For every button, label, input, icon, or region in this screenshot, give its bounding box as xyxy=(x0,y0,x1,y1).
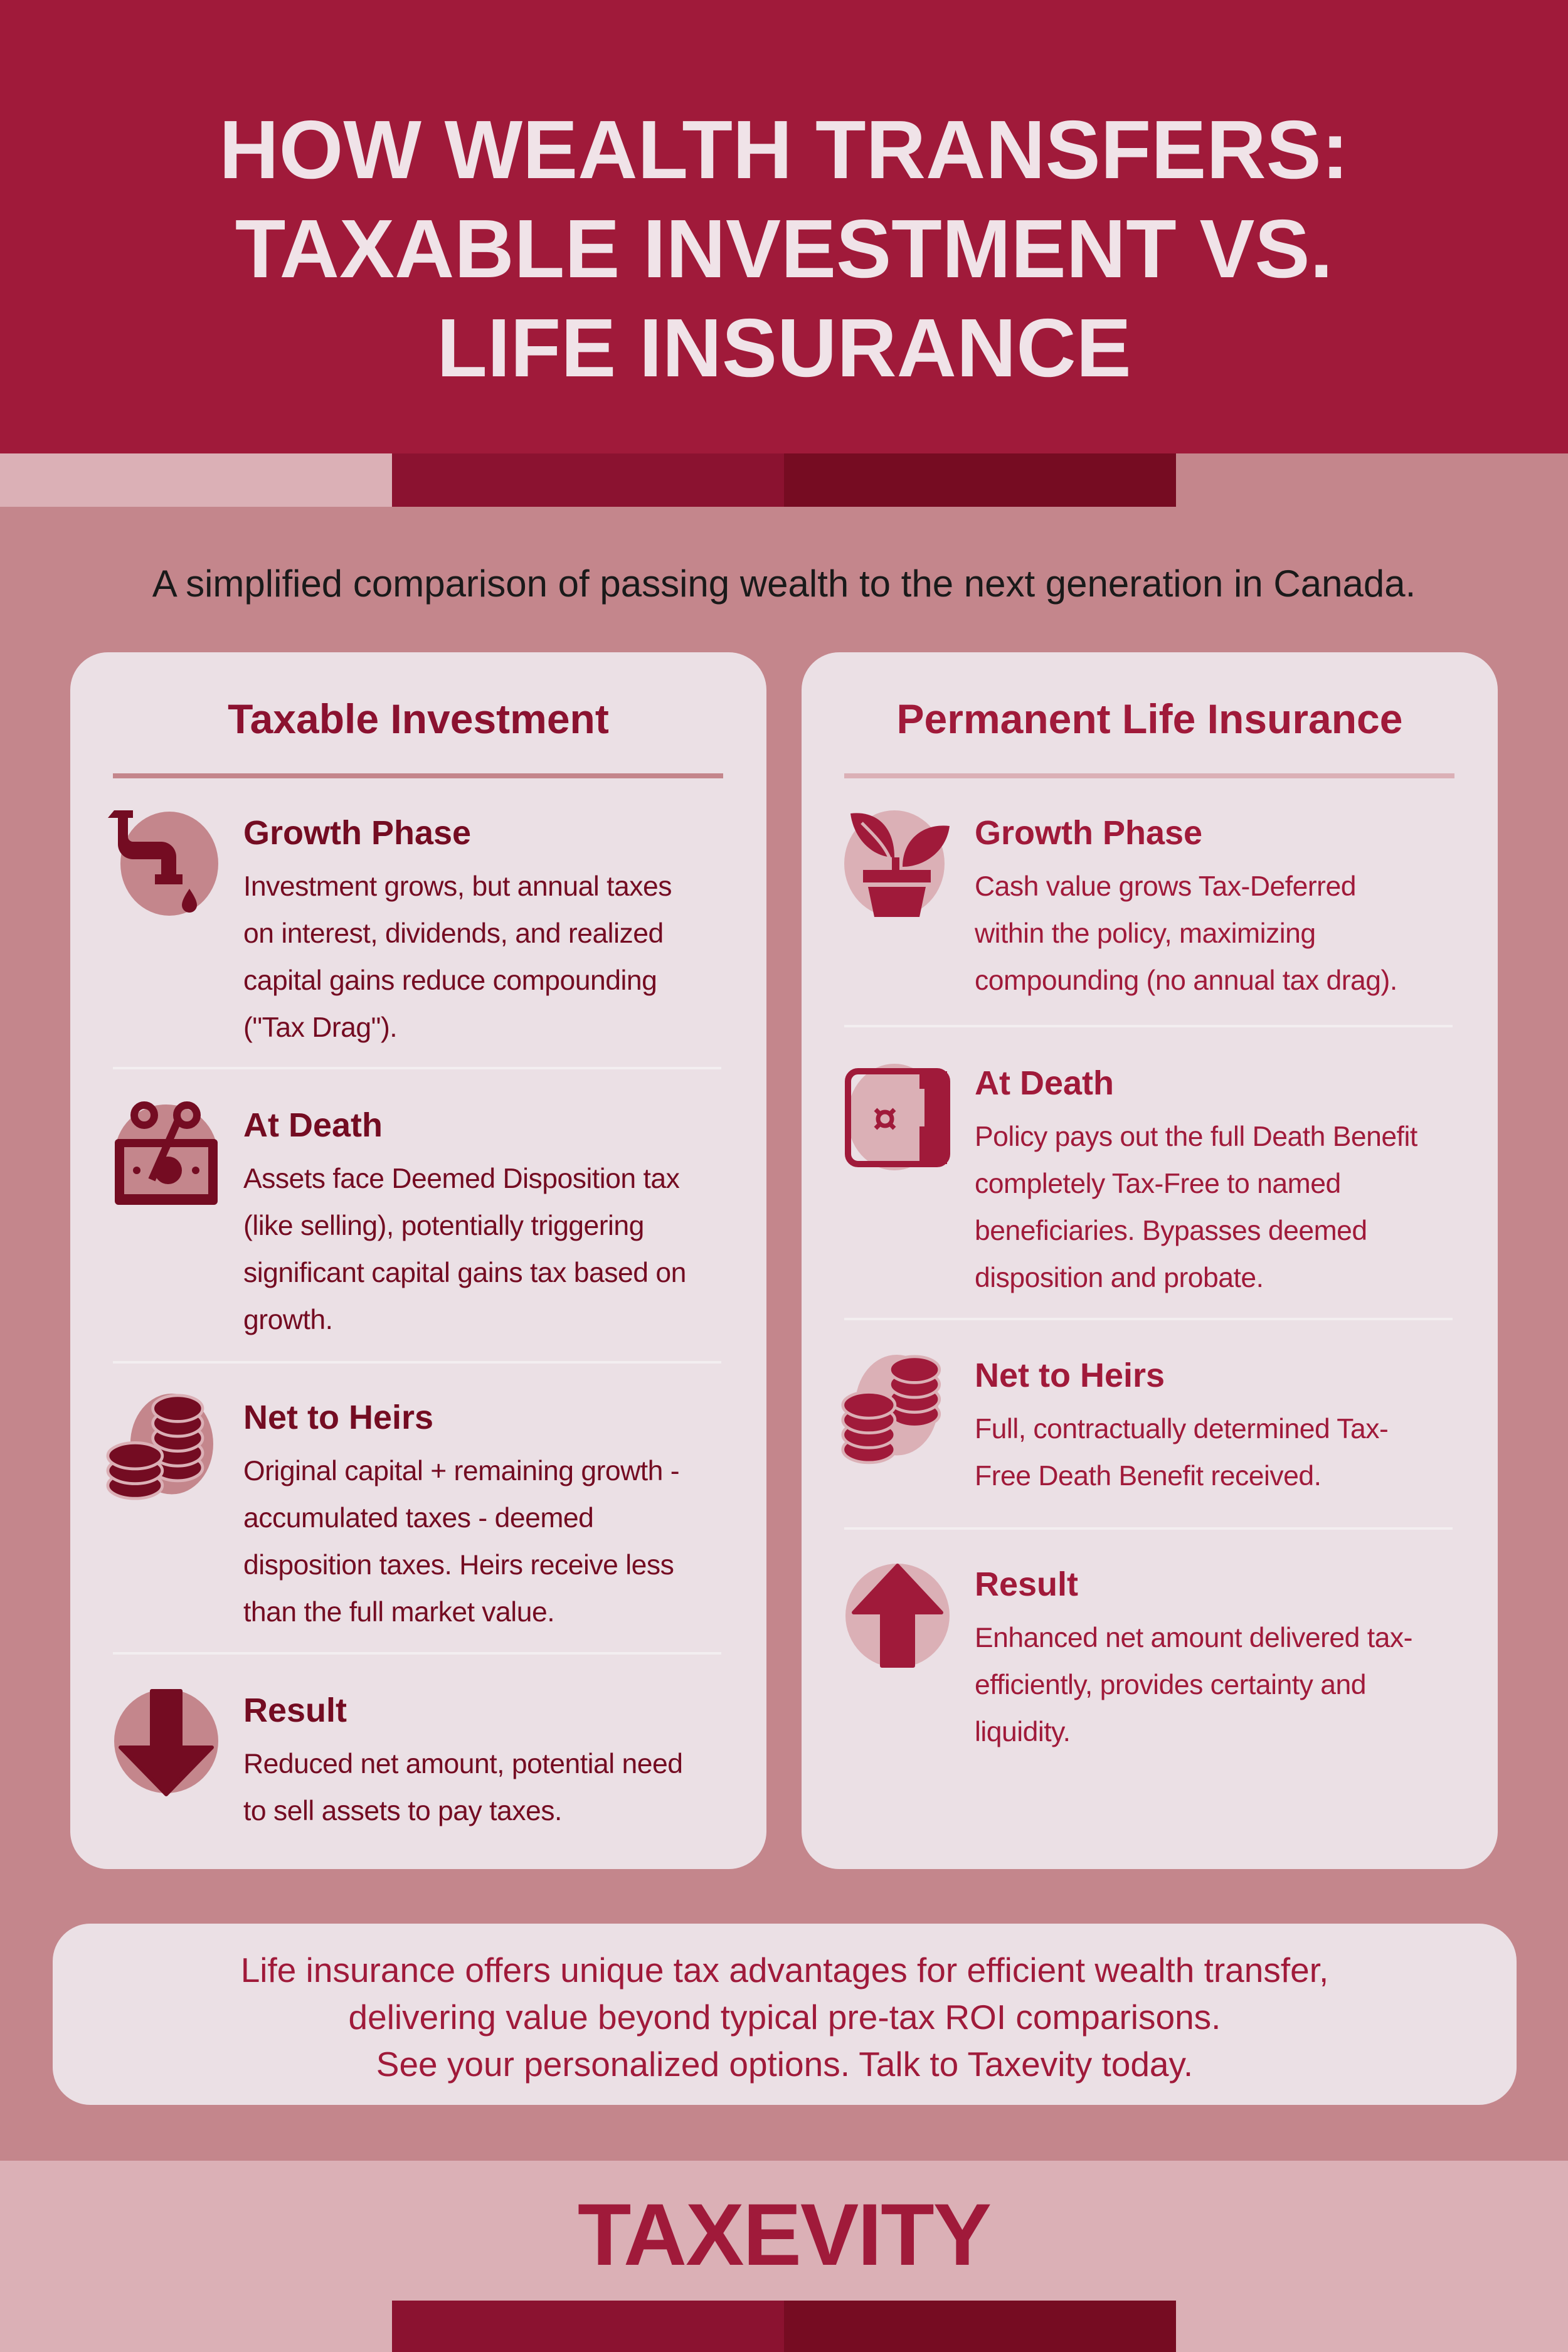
logo: TAXEVITY: TAXEVITY xyxy=(578,2185,990,2284)
panel: permanent life insurance xyxy=(802,652,1498,1869)
item: net to heirs (left) xyxy=(243,1399,679,1628)
subtitle: A simplified comparison of passing wealth to the next generation in Canada. xyxy=(152,563,1416,605)
item: result (left): Result xyxy=(243,1692,347,1729)
item: at death (left): Assets face Deemed Disposition tax xyxy=(243,1163,679,1194)
item: net to heirs (right): Full, contractually determined Tax- xyxy=(975,1414,1388,1444)
item: growth phase (right): Growth Phase xyxy=(975,814,1202,852)
item: at death (left): (like selling), potentially triggering xyxy=(243,1210,644,1241)
item: result (left): to sell assets to pay taxes. xyxy=(243,1796,562,1826)
title: LIFE INSURANCE xyxy=(437,302,1131,394)
callout: Life insurance offers unique tax advantages for efficient wealth transfer, xyxy=(241,1951,1328,1989)
item: at death (left): growth. xyxy=(243,1305,332,1335)
item: result (right) xyxy=(975,1565,1412,1747)
item: growth phase (right): within the policy, maximizing xyxy=(975,918,1316,949)
title xyxy=(219,103,1349,394)
icon: safe xyxy=(845,1064,950,1170)
item: net to heirs (right): Net to Heirs xyxy=(975,1357,1165,1394)
item: at death (right): Policy pays out the full Death Benefit xyxy=(975,1121,1417,1152)
item: growth phase (left): Investment grows, but annual taxes xyxy=(243,871,672,902)
item: growth phase (right) xyxy=(975,814,1397,996)
panel: taxable investment xyxy=(70,652,766,1869)
item: net to heirs (left): accumulated taxes - deemed xyxy=(243,1503,593,1534)
title: TAXABLE INVESTMENT VS. xyxy=(235,203,1333,295)
item: result (right): Enhanced net amount delivered tax- xyxy=(975,1623,1412,1653)
item: growth phase (left) xyxy=(243,814,672,1043)
heading: taxable investment: Taxable Investment xyxy=(228,696,609,742)
item: at death (left): At Death xyxy=(243,1106,383,1144)
item: growth phase (left): capital gains reduce compounding xyxy=(243,965,657,996)
item: at death (right): completely Tax-Free to named xyxy=(975,1168,1341,1199)
icon: coins xyxy=(107,1394,213,1500)
callout: See your personalized options. Talk to Taxevity today. xyxy=(376,2045,1193,2084)
item: growth phase (right): Cash value grows Tax-Deferred xyxy=(975,871,1356,902)
heading: permanent life insurance: Permanent Life Insurance xyxy=(897,696,1402,742)
item: result (left): Reduced net amount, potential need xyxy=(243,1749,682,1779)
icon: up arrow xyxy=(845,1564,950,1668)
bottom strip xyxy=(0,2301,1568,2352)
item: net to heirs (right): Free Death Benefit received. xyxy=(975,1461,1321,1491)
item: growth phase (left): on interest, dividends, and realized xyxy=(243,918,664,949)
item: result (left) xyxy=(243,1692,682,1826)
item: at death (right): beneficiaries. Bypasses deemed xyxy=(975,1216,1367,1246)
icon: down arrow xyxy=(114,1689,218,1796)
icon: coins xyxy=(842,1355,941,1464)
item: growth phase (left): ("Tax Drag"). xyxy=(243,1012,397,1043)
item: net to heirs (right) xyxy=(975,1357,1388,1491)
item: at death (left) xyxy=(243,1106,686,1335)
item: result (right): liquidity. xyxy=(975,1717,1070,1747)
item: net to heirs (left): disposition taxes. Heirs receive less xyxy=(243,1550,674,1581)
icon: plant xyxy=(844,810,950,917)
color strip xyxy=(0,453,1176,507)
item: net to heirs (left): Original capital + remaining growth - xyxy=(243,1456,679,1486)
item: result (right): efficiently, provides certainty and xyxy=(975,1670,1366,1700)
icon: money with percent xyxy=(115,1101,218,1205)
item: result (right): Result xyxy=(975,1565,1078,1603)
header xyxy=(0,0,1568,453)
item: at death (right): At Death xyxy=(975,1064,1114,1102)
callout: delivering value beyond typical pre-tax ROI comparisons. xyxy=(349,1998,1221,2037)
icon: leaking pipe xyxy=(108,810,218,916)
item: net to heirs (left): than the full market value. xyxy=(243,1597,554,1628)
item: net to heirs (left): Net to Heirs xyxy=(243,1399,433,1436)
item: at death (left): significant capital gains tax based on xyxy=(243,1258,686,1288)
item: at death (right) xyxy=(975,1064,1417,1293)
title: HOW WEALTH TRANSFERS: xyxy=(219,103,1349,196)
item: at death (right): disposition and probate. xyxy=(975,1263,1264,1293)
item: growth phase (left): Growth Phase xyxy=(243,814,471,852)
item: growth phase (right): compounding (no annual tax drag). xyxy=(975,965,1397,996)
callout xyxy=(53,1924,1517,2105)
footer xyxy=(0,2161,1568,2301)
